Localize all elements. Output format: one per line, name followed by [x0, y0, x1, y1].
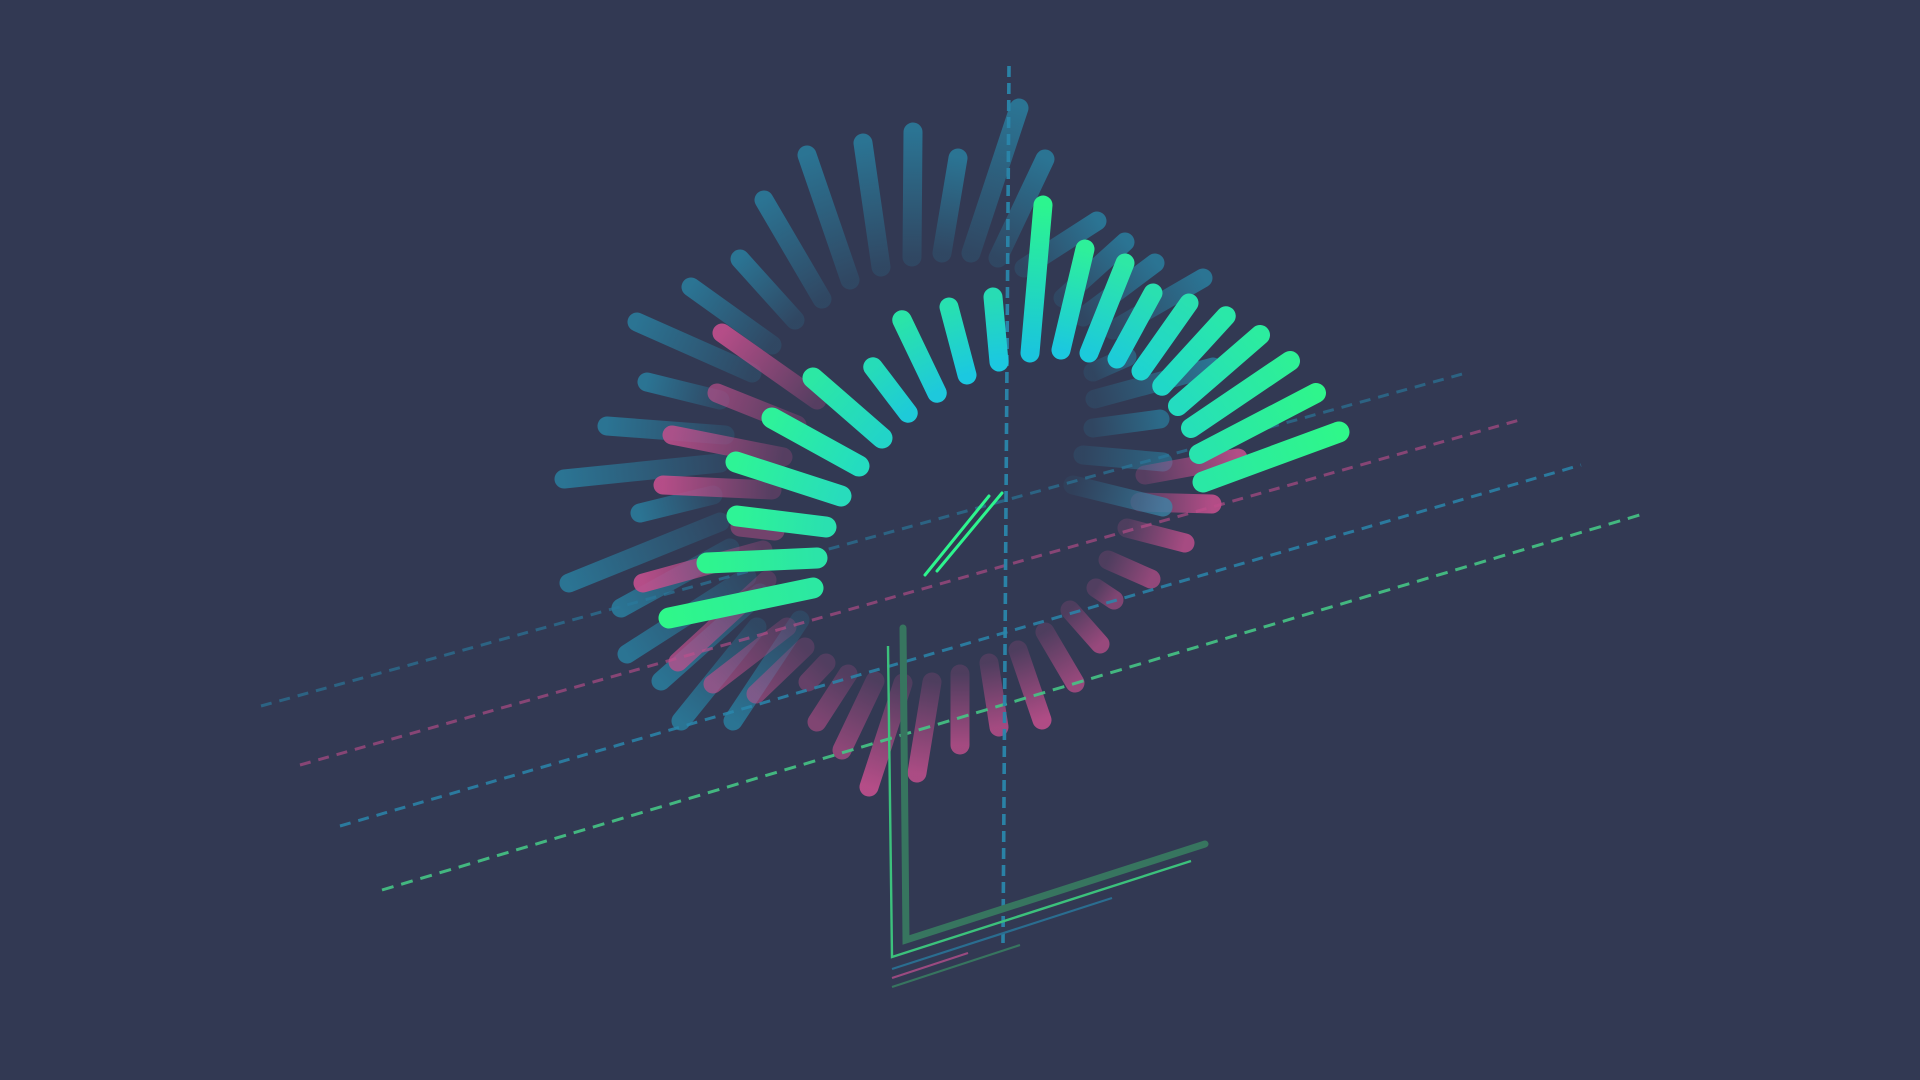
blue ray over pink on right side: [1073, 485, 1163, 507]
axis marks: L-shaped brackets and baselines: [888, 628, 1205, 987]
back ring: blue rays: [564, 108, 1213, 721]
dashed guide lines: [261, 66, 1643, 943]
center double tick: [925, 493, 1002, 575]
front ring: green-to-cyan rays: [669, 205, 1339, 618]
middle ring: pink rays: [643, 333, 1238, 787]
